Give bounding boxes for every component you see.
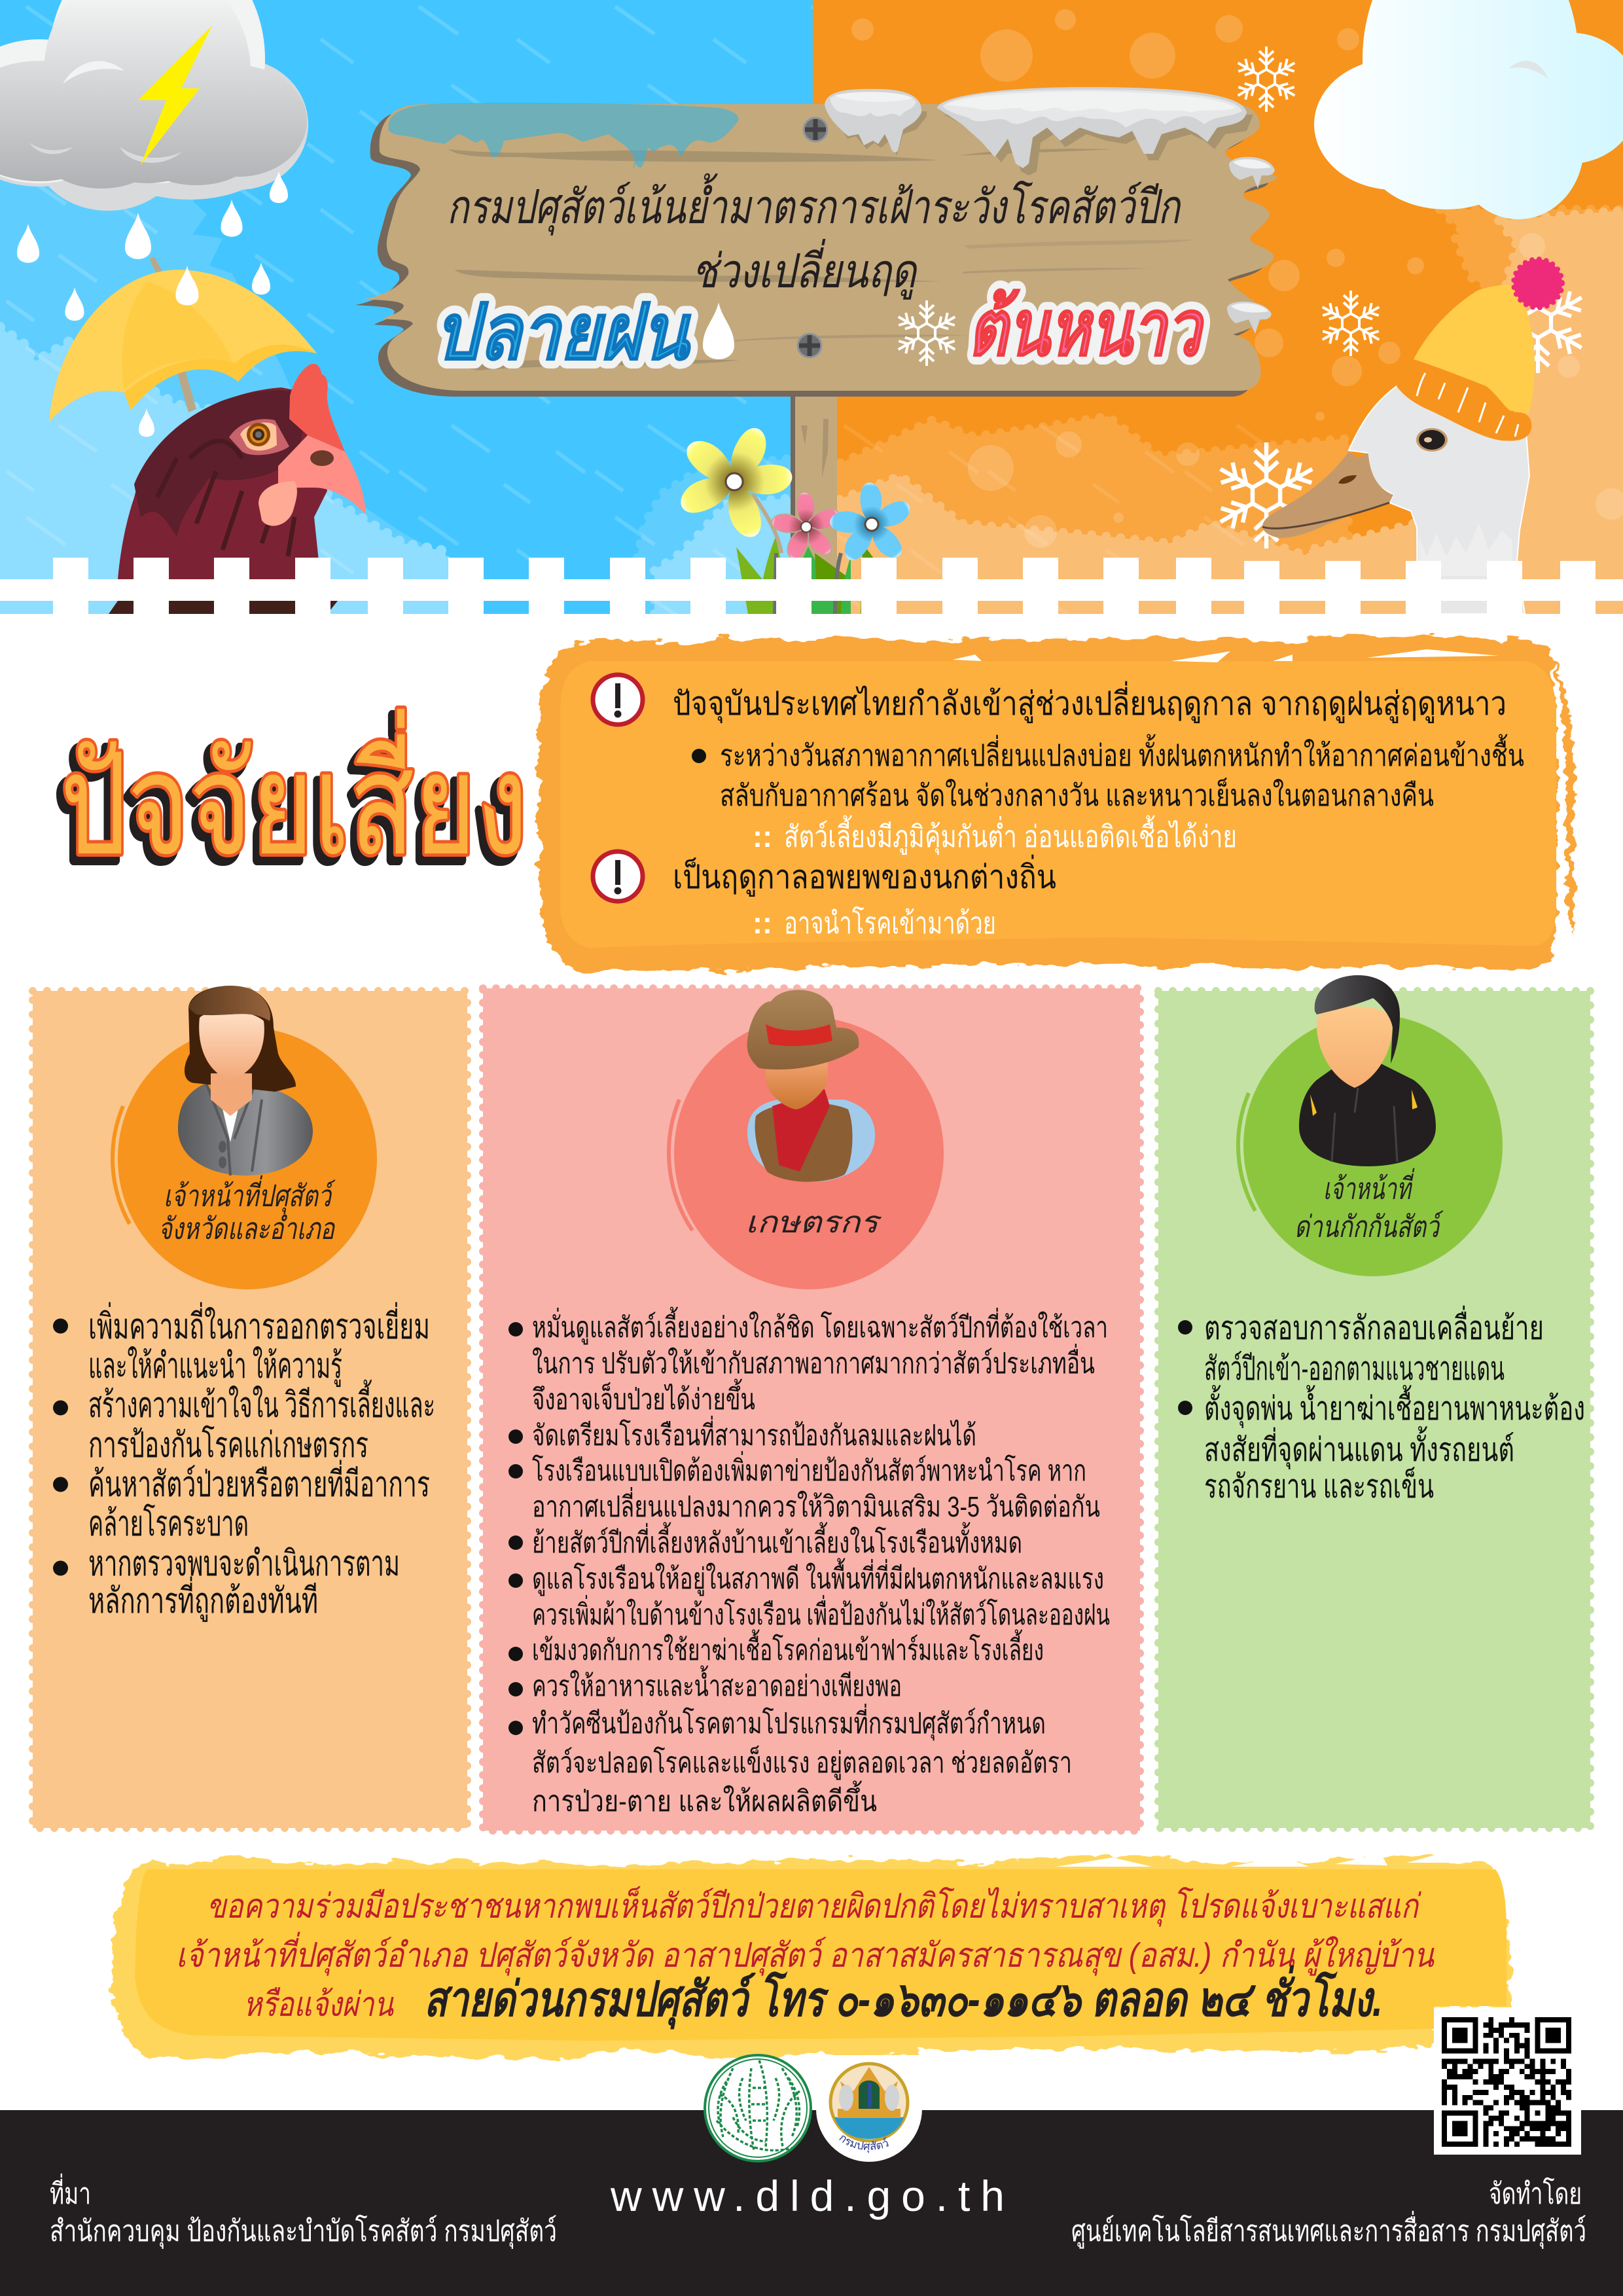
bullet list: ดูแลโรงเรือนให้อยู่ในสภาพดี ในพื้นที่ที่มีฝนตกหนักและลมแรง — [532, 1558, 1104, 1596]
heading: risk factors: ปัจจัยเสี่ยง — [60, 709, 528, 884]
text: weather detail — [720, 734, 1524, 812]
bullet list: หมั่นดูแลสัตว์เลี้ยงอย่างใกล้ชิด โดยเฉพาะสัตว์ปีกที่ต้องใช้เวลา — [532, 1306, 1108, 1345]
text: weather detail: สลับกับอากาศร้อน จัดในช่วงกลางวัน และหนาวเย็นลงในตอนกลางคืน — [720, 778, 1434, 812]
hotline: สายด่วนกรมปศุสัตว์ โทร ๐-๑๖๓๐-๑๑๔๖ ตลอด ๒๔ ชั่วโมง. — [424, 1965, 1383, 2030]
heading: start of cold season: ต้นหนาว — [968, 285, 1204, 372]
text: low immunity: :: — [753, 819, 772, 853]
icon: warning — [593, 675, 643, 725]
white picket fence — [0, 558, 1623, 614]
icon: white water drop — [703, 302, 734, 359]
circle badge — [113, 1028, 377, 1289]
signpost post — [791, 386, 837, 614]
illustration: chicken — [109, 364, 365, 614]
icon: Department of Livestock seal — [816, 2055, 922, 2162]
bullet list: ควรเพิ่มผ้าใบด้านข้างโรงเรือน เพื่อป้องกันไม่ให้สัตว์โดนละอองฝน — [532, 1594, 1110, 1631]
icon: bullet — [692, 749, 706, 763]
label: เกษตรกร — [745, 1205, 882, 1239]
bullet list — [53, 1302, 435, 1622]
heading: risk factors: ปัจจัยเสี่ยง — [55, 715, 523, 890]
bullet list: จึงอาจเจ็บป่วยได้ง่ายขึ้น — [532, 1378, 755, 1416]
panel: risk information — [539, 636, 1574, 971]
heading: risk factors: ปัจจัยเสี่ยง — [60, 709, 528, 884]
text: source credit: ที่มา — [50, 2173, 91, 2210]
wood grain — [448, 149, 1194, 370]
appeal text: หรือแจ้งผ่าน — [243, 1986, 394, 2024]
bullet list: อากาศเปลี่ยนแปลงมากควรให้วิตามินเสริม 3-5 วันติดต่อกัน — [532, 1486, 1100, 1523]
panel: provincial livestock officers — [33, 986, 467, 1828]
bullet list: รถจักรยาน และรถเข็น — [1204, 1467, 1434, 1505]
bullet list: สร้างความเข้าใจใน วิธีการเลี้ยงและ — [88, 1380, 435, 1425]
icon: Department of Livestock seal: กรมปศุสัตว์ — [839, 2136, 889, 2153]
icon: warning — [593, 852, 643, 901]
text: disease note: อาจนำโรคเข้ามาด้วย — [784, 906, 996, 940]
bullet list: การป่วย-ตาย และให้ผลผลิตดีขึ้น — [532, 1780, 877, 1818]
QR code — [1434, 2007, 1581, 2155]
heading: risk factors — [55, 709, 528, 890]
bullet list: ทำวัคซีนป้องกันโรคตามโปรแกรมที่กรมปศุสัตว์กำหนด — [532, 1703, 1046, 1741]
bullet list: จัดเตรียมโรงเรือนที่สามารถป้องกันลมและฝนได้ — [532, 1415, 976, 1452]
bullet list: หากตรวจพบจะดำเนินการตาม — [88, 1544, 400, 1583]
text: website: www.dld.go.th — [610, 2172, 1005, 2220]
icon: rain drops — [17, 171, 288, 437]
text: disease note — [753, 906, 996, 940]
bullet list: ค้นหาสัตว์ป่วยหรือตายที่มีอาการ — [88, 1460, 430, 1504]
icon: flowers and grass — [677, 423, 913, 614]
bullet list: สงสัยที่จุดผ่านแดน ทั้งรถยนต์ — [1204, 1426, 1514, 1469]
text: season change statement: ปัจจุบันประเทศไทยกำลังเข้าสู่ช่วงเปลี่ยนฤดูกาล จากฤดูฝนสู่ฤดูหนาว — [673, 681, 1507, 723]
bullet list: และให้คำแนะนำ ให้ความรู้ — [88, 1346, 342, 1387]
title: ช่วงเปลี่ยนฤดู — [692, 238, 918, 300]
panel: call to action — [112, 1854, 1510, 2060]
appeal text — [176, 1886, 1435, 2024]
illustration: duck with knitted hat — [1262, 259, 1562, 614]
label — [158, 1175, 336, 1246]
text: producer credit — [1071, 2177, 1586, 2249]
label: จังหวัดและอำเภอ — [158, 1211, 336, 1246]
icon: female officer — [178, 986, 313, 1175]
icon: snowflakes — [1215, 46, 1587, 548]
text: producer credit: จัดทำโดย — [1489, 2177, 1582, 2210]
bullet list: เพิ่มความถี่ในการออกตรวจเยี่ยม — [88, 1302, 430, 1346]
scene: weather background — [0, 0, 1623, 628]
icon: white cloud — [1314, 0, 1623, 219]
text: low immunity: สัตว์เลี้ยงมีภูมิคุ้มกันต่ำ อ่อนแอติดเชื้อได้ง่าย — [784, 815, 1237, 855]
title — [447, 173, 1182, 300]
bullet list: สัตว์จะปลอดโรคและแข็งแรง อยู่ตลอดเวลา ช่วยลดอัตรา — [532, 1746, 1072, 1780]
text: disease note: :: — [753, 906, 772, 940]
title: กรมปศุสัตว์เน้นย้ำมาตรการเฝ้าระวังโรคสัตว์ปีก — [447, 173, 1182, 236]
bullet list: ย้ายสัตว์ปีกที่เลี้ยงหลังบ้านเข้าเลี้ยงในโรงเรือนทั้งหมด — [532, 1522, 1022, 1559]
footer band — [0, 2110, 1623, 2296]
appeal text: ขอความร่วมมือประชาชนหากพบเห็นสัตว์ปีกป่วยตายผิดปกติโดยไม่ทราบสาเหตุ โปรดแจ้งเบาะแสแก่ — [207, 1886, 1421, 1927]
text: migration season: เป็นฤดูกาลอพยพของนกต่างถิ่น — [673, 855, 1056, 897]
snow on sign — [825, 87, 1275, 334]
screws — [798, 118, 827, 357]
label: เจ้าหน้าที่ปศุสัตว์ — [164, 1175, 336, 1214]
circle badge — [1238, 1014, 1503, 1276]
bullet list: เข้มงวดกับการใช้ยาฆ่าเชื้อโรคก่อนเข้าฟาร์มและโรงเลี้ยง — [532, 1629, 1044, 1666]
text: source credit: สำนักควบคุม ป้องกันและบำบัดโรคสัตว์ กรมปศุสัตว์ — [50, 2214, 557, 2249]
water drip — [389, 103, 738, 169]
circle badge — [669, 1017, 944, 1289]
bullet list: โรงเรือนแบบเปิดต้องเพิ่มตาข่ายป้องกันสัตว์พาหะนำโรค หาก — [532, 1450, 1086, 1487]
bullet list — [508, 1306, 1110, 1818]
heading: end of rainy season: ปลายฝน — [435, 289, 690, 376]
icon: ministry seal — [705, 2055, 811, 2161]
label: ด่านกักกันสัตว์ — [1294, 1210, 1444, 1244]
panel: farmers — [483, 988, 1140, 1831]
bullet list: ในการ ปรับตัวให้เข้ากับสภาพอากาศมากกว่าสัตว์ประเภทอื่น — [532, 1343, 1095, 1380]
text: low immunity — [753, 815, 1237, 855]
icon: grey storm cloud with lightning — [0, 0, 308, 211]
icon: yellow umbrella — [49, 257, 317, 422]
icon: snowflake on sign — [895, 300, 959, 366]
heading: end of rainy season: ปลายฝน — [435, 289, 690, 376]
bullet list: การป้องกันโรคแก่เกษตรกร — [88, 1425, 368, 1465]
icon: farmer — [747, 990, 875, 1182]
text: source credit — [50, 2173, 557, 2249]
bullet list: หลักการที่ถูกต้องทันที — [88, 1576, 318, 1622]
label: เจ้าหน้าที่ — [1323, 1168, 1415, 1206]
heading: start of cold season: ต้นหนาว — [968, 285, 1204, 372]
wooden sign — [355, 87, 1277, 397]
bullet list — [1178, 1306, 1585, 1505]
icon: quarantine officer — [1299, 975, 1436, 1166]
bullet list: ควรให้อาหารและน้ำสะอาดอย่างเพียงพอ — [532, 1665, 902, 1702]
panel: animal quarantine officers — [1158, 975, 1590, 1828]
appeal text: เจ้าหน้าที่ปศุสัตว์อำเภอ ปศุสัตว์จังหวัด อาสาปศุสัตว์ อาสาสมัครสาธารณสุข (อสม.) กำนัน ผู้ใหญ่บ้าน — [176, 1931, 1435, 1976]
label — [1294, 1168, 1444, 1244]
bullet list: คล้ายโรคระบาด — [88, 1503, 249, 1543]
